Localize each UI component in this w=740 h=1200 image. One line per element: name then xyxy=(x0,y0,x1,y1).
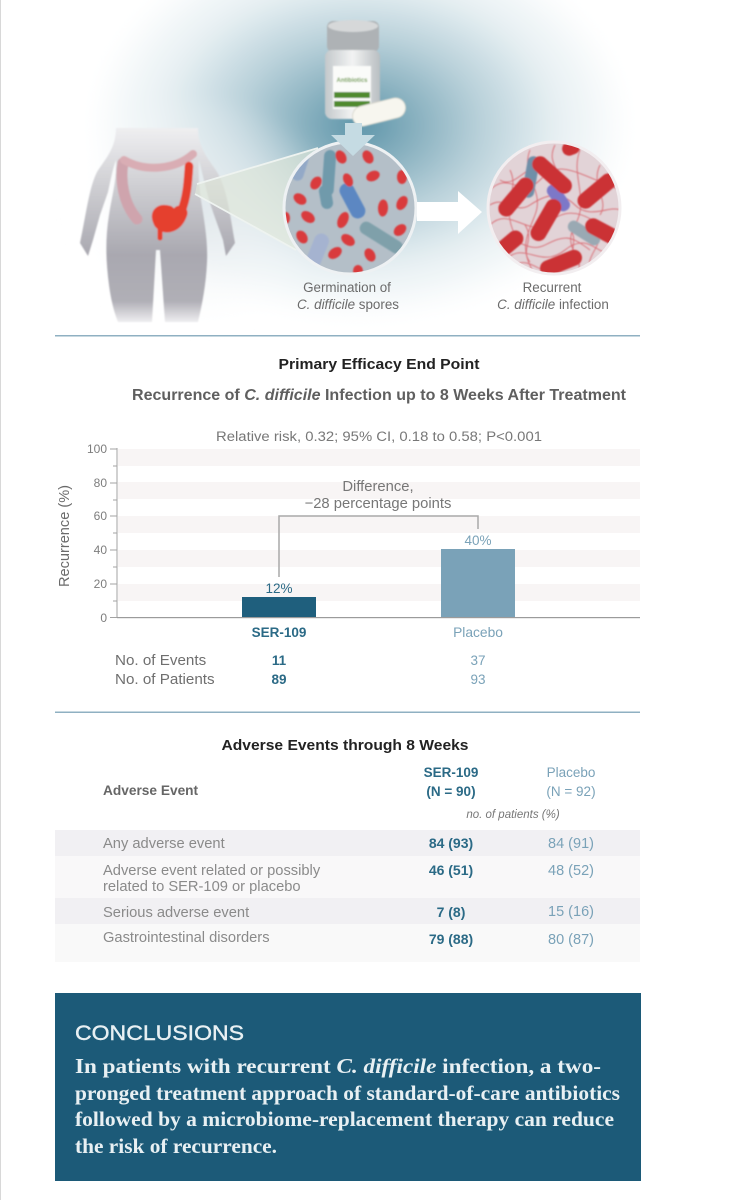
illustration: antibiotics and C. difficile recurrence xyxy=(70,0,630,322)
table header xyxy=(103,765,596,821)
y axis xyxy=(87,442,117,625)
colon xyxy=(122,154,193,238)
conclusions text: In patients with recurrent C. difficile infection, a two- xyxy=(75,1054,601,1078)
circle: germination of spores xyxy=(282,142,416,277)
zoom cone from colon xyxy=(195,148,318,250)
conclusions text xyxy=(75,1054,620,1158)
value: 12%: 12% xyxy=(265,581,293,596)
subheading: recurrence: Recurrence of C. difficile Infection up to 8 Weeks After Treatment xyxy=(132,387,627,404)
table rows: Any adverse event xyxy=(103,836,225,852)
icon: antibiotics bottle and pill: Antibiotics xyxy=(336,78,368,84)
table rows: Serious adverse event xyxy=(103,905,249,921)
table header: Placebo xyxy=(547,765,595,780)
value: 40%: 40% xyxy=(464,533,492,548)
table: adverse events xyxy=(55,765,640,962)
table rows: 84 (93) xyxy=(429,835,473,851)
patient counts: No. of Patients xyxy=(115,671,215,688)
conclusions heading: CONCLUSIONS xyxy=(75,1022,244,1045)
table rows: 48 (52) xyxy=(548,863,594,879)
table header: Adverse Event xyxy=(103,783,199,798)
conclusions text: followed by a microbiome-replacement therapy can reduce xyxy=(75,1107,614,1131)
conclusions text: the risk of recurrence. xyxy=(75,1134,277,1158)
patient counts: 37 xyxy=(470,653,486,668)
difference label: Difference, xyxy=(342,479,414,495)
table rows: 84 (91) xyxy=(548,836,594,852)
table rows: 7 (8) xyxy=(437,904,465,920)
table rows: Adverse event related or possibly xyxy=(103,863,321,879)
patient counts: 11 xyxy=(272,653,287,668)
panel: conclusions xyxy=(55,993,641,1181)
arrow: antibiotics to germination xyxy=(331,123,375,156)
y axis: 60 xyxy=(94,509,107,523)
arrow: germination to recurrence xyxy=(417,191,482,234)
caption: germination: C. difficile spores xyxy=(297,297,399,312)
conclusions text: pronged treatment approach of standard-of-care antibiotics xyxy=(75,1081,620,1105)
icon: antibiotics bottle and pill xyxy=(325,20,408,128)
table header: SER-109 xyxy=(424,765,478,780)
relative risk note: Relative risk, 0.32; 95% CI, 0.18 to 0.58; P<0.001 xyxy=(216,429,542,444)
table rows: 46 (51) xyxy=(429,862,473,878)
difference label: −28 percentage points xyxy=(305,496,451,512)
table rows: 79 (88) xyxy=(429,931,473,947)
table rows xyxy=(103,835,594,948)
y axis: 0 xyxy=(100,611,107,625)
heading: primary efficacy end point: Primary Efficacy End Point xyxy=(278,357,480,373)
bar: placebo xyxy=(441,549,515,617)
table header: (N = 92) xyxy=(546,784,596,799)
bar chart: recurrence xyxy=(57,442,640,640)
background glow xyxy=(70,0,630,320)
label: placebo: Placebo xyxy=(453,625,503,640)
bracket: difference xyxy=(279,516,478,577)
circle: recurrent infection xyxy=(488,138,622,280)
icon: human body silhouette with colon xyxy=(80,128,235,322)
table header: no. of patients (%) xyxy=(466,809,560,821)
heading: adverse events: Adverse Events through 8 Weeks xyxy=(222,738,468,754)
table rows: related to SER-109 or placebo xyxy=(103,879,301,895)
axis title: Recurrence (%) xyxy=(57,485,73,587)
label: SER-109: SER-109 xyxy=(252,625,306,640)
caption: germination: Germination of xyxy=(303,280,391,295)
bar: SER-109 xyxy=(242,597,316,617)
patient counts xyxy=(115,652,486,688)
y axis: 80 xyxy=(94,476,107,490)
y axis: 20 xyxy=(94,577,107,591)
caption: recurrent infection: C. difficile infection xyxy=(497,297,609,312)
table rows: 15 (16) xyxy=(548,904,594,920)
y axis: 40 xyxy=(94,543,107,557)
patient counts: 89 xyxy=(271,672,287,687)
table rows: 80 (87) xyxy=(548,932,594,948)
table rows: Gastrointestinal disorders xyxy=(103,930,270,946)
patient counts: No. of Events xyxy=(115,652,207,669)
caption: recurrent infection: Recurrent xyxy=(523,280,582,295)
table header: (N = 90) xyxy=(426,784,476,799)
y axis: 100 xyxy=(87,442,107,456)
patient counts: 93 xyxy=(470,672,486,687)
